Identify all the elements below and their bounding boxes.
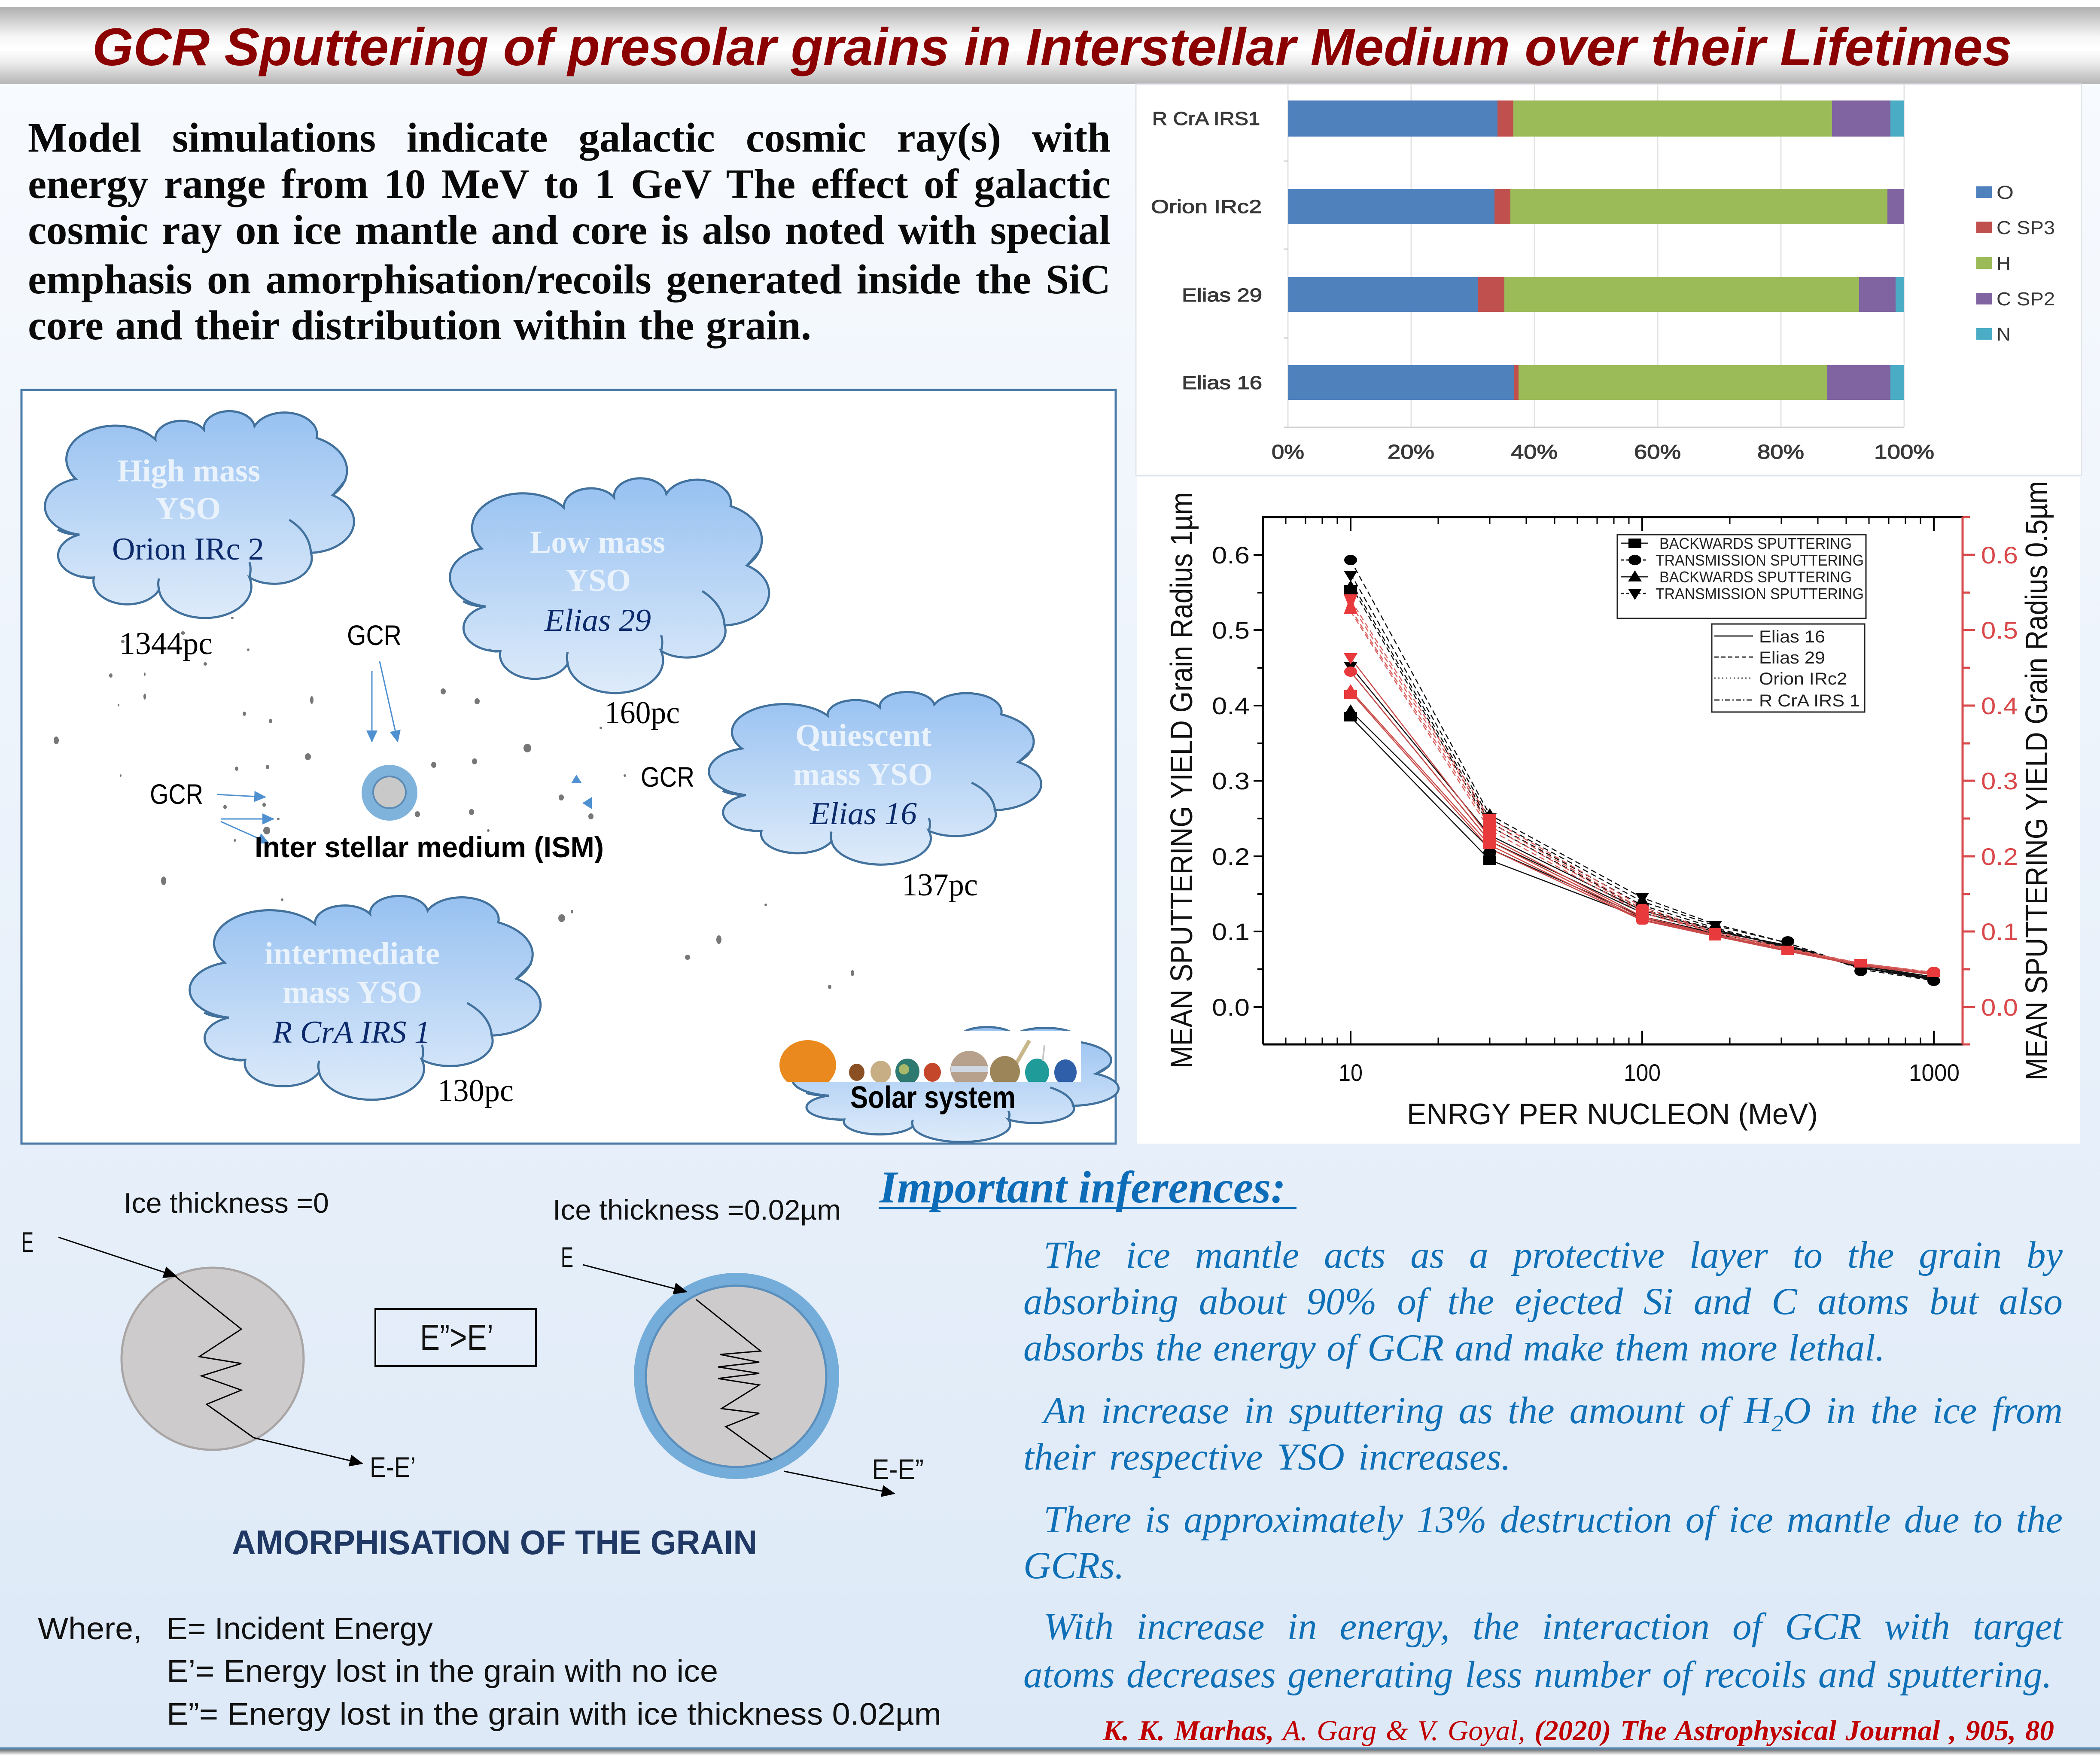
intro paragraph: core and their distribution within the grain. (28, 302, 811, 348)
cloud: high mass YSO: High mass (117, 453, 260, 489)
GCR labels (150, 619, 694, 810)
category labels: Orion IRc2 (1151, 196, 1262, 217)
percent axis labels (1272, 441, 1934, 463)
cloud: high mass YSO: YSO (155, 491, 221, 526)
bar chart legend: C SP3 (1997, 217, 2055, 238)
grain with ice mantle: E-E” (872, 1453, 924, 1485)
panel: amorphisation diagram (21, 1187, 941, 1732)
legend: sputtering type: BACKWARDS SPUTTERING (1659, 568, 1852, 586)
intro paragraph: energy range from 10 MeV to 1 GeV The effect of galactic (28, 161, 1111, 207)
distance labels: 130pc (438, 1073, 514, 1108)
left axis tick labels: 0.3 (1212, 767, 1250, 794)
bar chart legend: N (1997, 324, 2011, 345)
percent axis labels: 100% (1874, 441, 1934, 463)
left axis tick labels: 0.6 (1212, 542, 1250, 569)
legend: sputtering type: TRANSMISSION SPUTTERING (1656, 551, 1864, 569)
intro paragraph: emphasis on amorphisation/recoils generated inside the SiC (28, 256, 1111, 302)
right axis tick labels (1981, 542, 2018, 1021)
chart axes (1254, 517, 1975, 1044)
definitions: E’= Energy lost in the grain with no ice (167, 1654, 718, 1689)
cloud: intermediate mass YSO: mass YSO (283, 975, 422, 1010)
legend: sources: Elias 29 (1759, 648, 1825, 667)
dust grains scattered (54, 617, 854, 989)
data markers (1344, 555, 1940, 986)
cloud: solar system (765, 1027, 1119, 1142)
inference: ice mantle: absorbing about 90% of the ejected Si and C atoms but also (1023, 1281, 2063, 1323)
panel: stacked bar chart (1136, 84, 2082, 475)
left axis tick labels: 0.4 (1212, 692, 1250, 719)
bar chart legend: H (1997, 253, 2011, 274)
category labels: Elias 16 (1182, 372, 1262, 393)
cloud: quiescent mass YSO (709, 692, 1041, 864)
inference: sputtering increase: their respective YSO increases. (1023, 1436, 1511, 1478)
x axis tick labels: 10 (1339, 1059, 1363, 1086)
GCR labels: GCR (641, 761, 694, 793)
category labels: R CrA IRS1 (1152, 108, 1260, 129)
icon: grain with ice mantle (362, 765, 417, 821)
x axis tick labels: 1000 (1909, 1059, 1960, 1086)
right y axis title: MEAN SPUTTERING YIELD Grain Radius 0.5µm (2020, 481, 2054, 1080)
category labels: Elias 29 (1182, 285, 1262, 306)
inference: sputtering increase (1023, 1392, 2063, 1478)
bar chart legend (1976, 182, 2055, 345)
intro paragraph (28, 117, 1111, 383)
cloud: intermediate mass YSO: intermediate (265, 936, 440, 971)
label: ice thickness zero: Ice thickness =0 (124, 1187, 329, 1219)
grain with ice mantle (561, 1241, 924, 1494)
definitions: E”= Energy lost in the grain with ice thickness 0.02µm (167, 1697, 941, 1732)
inference: sputtering increase: An increase in sputtering as the amount of H2O in the ice from (1044, 1390, 2063, 1436)
grain without ice: E-E’ (370, 1451, 416, 1483)
inference: mantle destruction (1023, 1501, 2063, 1587)
percent axis labels: 40% (1511, 441, 1558, 463)
heading: important inferences: Important inferences: (879, 1162, 1286, 1212)
cloud: low mass YSO: Low mass (530, 525, 665, 560)
inference: mantle destruction: There is approximately 13% destruction of ice mantle due to the (1044, 1499, 2063, 1541)
right axis tick labels: 0.1 (1981, 918, 2018, 945)
inference: ice mantle (1023, 1236, 2063, 1367)
legend: sputtering type (1617, 535, 1866, 618)
inference: energy dependence (1023, 1608, 2063, 1696)
x axis tick labels: 100 (1624, 1059, 1661, 1086)
bar: Elias 29 (1288, 277, 1904, 312)
GCR labels: GCR (150, 778, 203, 810)
percent axis labels: 80% (1757, 441, 1804, 463)
intro paragraph: cosmic ray on ice mantle and core is also noted with special (28, 207, 1111, 253)
label: ice thickness 0.02: Ice thickness =0.02µm (553, 1194, 841, 1226)
data lines (1351, 560, 1934, 981)
percent axis labels: 20% (1388, 441, 1434, 463)
right axis tick labels: 0.2 (1981, 843, 2018, 870)
inference: ice mantle: The ice mantle acts as a protective layer to the grain by (1044, 1234, 2063, 1276)
legend: sources: Elias 16 (1759, 627, 1825, 646)
inference: ice mantle: absorbs the energy of GCR and make them more lethal. (1023, 1327, 1885, 1369)
legend: sources (1712, 624, 1865, 712)
comparison box: E”>E’ (420, 1317, 493, 1357)
cloud: low mass YSO (450, 478, 769, 693)
definitions: E= Incident Energy (167, 1612, 433, 1646)
left axis tick labels: 0.5 (1212, 617, 1250, 644)
x axis title: ENRGY PER NUCLEON (MeV) (1407, 1097, 1818, 1131)
cloud: high mass YSO: Orion IRc 2 (112, 532, 264, 567)
bar: Elias 16 (1288, 365, 1904, 400)
left axis tick labels: 0.2 (1212, 843, 1250, 870)
distance labels (119, 626, 978, 1108)
title banner (0, 7, 2100, 84)
label: interstellar medium: Inter stellar medium (ISM) (255, 831, 604, 864)
bar: R CrA IRS1 (1288, 100, 1904, 137)
cloud: low mass YSO: YSO (566, 563, 631, 598)
bottom bar (0, 1747, 2100, 1755)
cloud: quiescent mass YSO: Quiescent (795, 718, 931, 753)
inference: mantle destruction: GCRs. (1023, 1545, 1124, 1587)
grain without ice: E (21, 1226, 33, 1258)
bar: Orion IRc2 (1288, 189, 1904, 224)
heading: amorphisation of the grain: AMORPHISATION OF THE GRAIN (232, 1523, 757, 1561)
cloud: high mass YSO (45, 411, 354, 618)
right axis tick labels: 0.5 (1981, 617, 2018, 644)
left axis tick labels: 0.1 (1212, 918, 1250, 945)
intro paragraph: Model simulations indicate galactic cosmic ray(s) with (28, 115, 1111, 161)
left axis tick labels: 0.0 (1212, 994, 1250, 1021)
cloud: solar system: Solar system (850, 1080, 1016, 1115)
title banner: GCR Sputtering of presolar grains in Interstellar Medium over their Lifetimes (92, 18, 2012, 77)
legend: sputtering type: TRANSMISSION SPUTTERING (1656, 585, 1864, 603)
comparison box (375, 1309, 536, 1366)
grain without ice (21, 1226, 416, 1483)
citation: K. K. Marhas, A. Garg & V. Goyal, (2020) The Astrophysical Journal , 905, 80 (1103, 1715, 2054, 1747)
panel: interstellar medium map (21, 390, 1119, 1144)
arrows: GCR towards grain (217, 661, 398, 843)
grain with ice mantle: E (561, 1241, 573, 1273)
GCR labels: GCR (347, 619, 402, 651)
percent axis labels: 60% (1634, 441, 1681, 463)
bar chart legend: O (1997, 182, 2014, 203)
inference: energy dependence: With increase in energy, the interaction of GCR with target (1044, 1606, 2063, 1648)
right axis tick labels: 0.6 (1981, 542, 2018, 569)
inference: energy dependence: atoms decreases generating less number of recoils and sputtering. (1023, 1654, 2052, 1696)
right axis tick labels: 0.3 (1981, 767, 2018, 794)
left y axis title: MEAN SPUTTERING YIELD Grain Radius 1µm (1165, 492, 1199, 1068)
icon: sun and planets (779, 1039, 1077, 1082)
definitions: Where, (38, 1612, 142, 1646)
category labels (1151, 108, 1262, 393)
legend: sources: R CrA IRS 1 (1759, 691, 1860, 710)
cloud: quiescent mass YSO: mass YSO (793, 757, 933, 792)
legend: sputtering type: BACKWARDS SPUTTERING (1659, 535, 1852, 552)
distance labels: 137pc (902, 867, 978, 903)
panel: sputtering yield line chart (1137, 477, 2080, 1144)
cloud: quiescent mass YSO: Elias 16 (810, 796, 917, 831)
right axis tick labels: 0.0 (1981, 994, 2018, 1021)
left axis tick labels (1212, 542, 1250, 1021)
cloud: low mass YSO: Elias 29 (544, 603, 651, 638)
right axis tick labels: 0.4 (1981, 692, 2018, 719)
arrowheads from right GCR (571, 775, 592, 809)
cloud: intermediate mass YSO (190, 896, 541, 1100)
legend: sources: Orion IRc2 (1759, 670, 1847, 688)
cloud: intermediate mass YSO: R CrA IRS 1 (272, 1015, 430, 1050)
x axis tick labels (1339, 1059, 1960, 1086)
definitions (38, 1612, 941, 1732)
distance labels: 1344pc (119, 626, 213, 661)
distance labels: 160pc (605, 695, 680, 730)
bar chart legend: C SP2 (1997, 289, 2055, 310)
percent axis labels: 0% (1272, 441, 1304, 463)
